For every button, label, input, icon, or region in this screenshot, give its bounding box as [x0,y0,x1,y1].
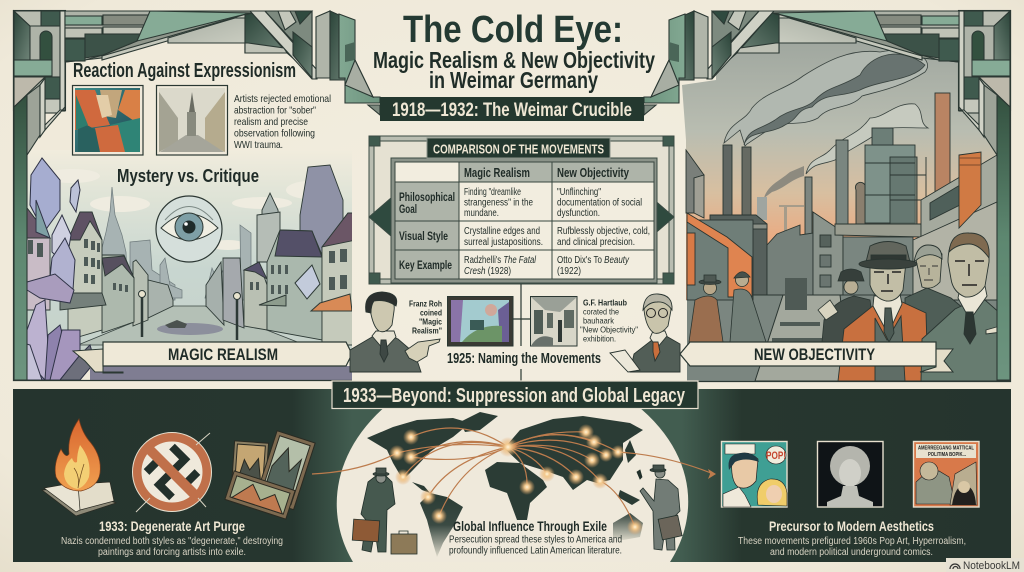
timeline connector [513,284,530,381]
table grid [395,162,654,279]
title [373,9,655,93]
table text: Philosophical [399,192,455,204]
continents [367,412,643,557]
heading: mystery vs critique: Mystery vs. Critique [117,166,259,186]
text: Franz Roh caption: "Magic [419,316,442,326]
panel outlines [14,10,1010,382]
right windows [250,249,347,294]
table text: New Objectivity [557,166,629,180]
table text [399,166,650,277]
text: degenerate art purge: 1933: Degenerate Art Purge [99,518,245,534]
figure: exile with pistol and briefcase [637,465,682,550]
table header bar: COMPARISON OF THE MOVEMENTS [433,142,604,156]
table text: Finding "dreamlike [464,187,521,198]
table text: Cresh (1928) [464,266,511,277]
text: G.F. Hartlaub caption: "New Objectivity" [580,324,638,334]
portrait: G.F. Hartlaub [610,294,680,372]
table text: Goal [399,204,417,216]
text: precursor to modern aesthetics: and modern political underground comics. [770,547,933,558]
comic: political underground [914,442,979,507]
text: reaction description: realism and precise [234,116,308,128]
back suited man [904,244,961,334]
panel: comparison table [369,136,674,284]
industrial buildings [686,148,996,300]
table text: strangeness" in the [464,198,533,208]
icon: destroyed paintings [225,431,315,519]
text: degenerate art purge: Nazis condemned both styles as "degenerate," destroying [61,536,283,547]
exile routes [312,428,711,527]
tank tower [855,128,926,224]
comic: pop art couple: POP! [766,450,786,462]
badge: NotebookLM: NotebookLM [963,560,1020,572]
workers in background [689,269,876,342]
left windows [28,239,128,292]
floating diamond crystal [295,265,320,299]
text: G.F. Hartlaub caption: bauhaark [583,316,615,326]
text: G.F. Hartlaub caption: exhibition. [583,334,616,344]
street lamps [138,290,240,340]
text: reaction description: abstraction for "sober" [234,104,316,116]
drawing: sober city street [156,86,228,155]
panel: new objectivity factory scene [682,20,1010,381]
globe and world map [312,400,716,562]
comic: political underground: POLITIMA BOPIK... [928,452,967,458]
table text: Rufblessly objective, cold, [557,226,650,237]
arrowhead [708,469,716,479]
ribbon: magic realism [73,342,352,373]
stained-glass frame [369,136,674,284]
road [78,306,305,345]
text: precursor to modern aesthetics: Precursor to Modern Aesthetics [769,518,934,534]
text: precursor to modern aesthetics [738,518,966,558]
eye in crystal ball [156,196,222,262]
orange canopy [687,213,753,300]
title: Magic Realism & New Objectivity [373,47,655,73]
text: Franz Roh caption: Franz Roh [409,298,442,308]
clouds [59,176,305,250]
art deco corner frame: left [14,10,380,380]
figure: exile with suitcases [352,468,417,554]
table text: (1922) [557,266,581,277]
heading: 1925 naming the movements: 1925: Naming the Movements [447,351,601,367]
table text: Key Example [399,260,452,272]
icon: burning book [42,419,116,516]
text: global influence through exile: Global Influence Through Exile [453,518,607,534]
comic: pop art couple [722,442,787,507]
text: Franz Roh caption: Realism" [412,326,442,336]
ground strip [90,366,352,380]
man in orange coat and hat [838,242,928,381]
table text: Radzhelli's The Fatal [464,255,537,266]
portrait: Franz Roh [350,292,440,372]
banner: 1918-1932: 1918—1932: The Weimar Crucible [392,100,632,121]
table text: surreal justapositions. [464,237,543,248]
distant skyline [101,187,251,300]
drawing: Bauhaus gallery interior [530,296,577,346]
panel: magic realism street scene [14,150,356,380]
panel: suppression and global legacy [13,389,1011,562]
ribbon: new objectivity [680,342,953,372]
painting: expressionist portrait [72,86,143,155]
sky [27,150,352,350]
badge: NotebookLM [946,558,1024,572]
banner: 1933 and beyond [332,381,698,408]
chimneys [723,93,950,235]
text: precursor to modern aesthetics: These movements prefigured 1960s Pop Art, Hyperroalism, [738,536,966,547]
exile destination glows [389,424,643,535]
painting: magic realist landscape [448,296,513,346]
table text: dysfunction. [557,208,600,219]
rail yard ground [755,295,850,381]
table text: and clinical precision. [557,237,635,248]
yard backdrop [687,290,1010,381]
left side buildings [27,208,173,340]
text: G.F. Hartlaub caption [580,298,638,344]
table text: Magic Realism [464,166,530,180]
front man in grey suit [921,233,1010,381]
table text: Otto Dix's To Beauty [557,255,630,266]
banner: 1933 and beyond: 1933—Beyond: Suppression and Global Legacy [343,385,686,407]
crystals [28,157,92,380]
icon: prohibited swastika symbol [132,432,212,512]
right side buildings [206,165,356,345]
text: reaction description: observation following [234,128,315,140]
text: reaction description: Artists rejected emotional [234,93,331,105]
heading: reaction against expressionism: Reaction Against Expressionism [73,60,296,82]
table text: mundane. [464,208,499,219]
text: reaction description [234,93,331,151]
awnings [311,294,352,311]
smoke plumes [724,50,928,198]
title: The Cold Eye: [403,9,623,51]
text: G.F. Hartlaub caption: corated the [583,306,619,316]
text: Franz Roh caption [409,298,442,336]
table text: documentation of social [557,198,642,208]
text: global influence through exile: profoundly influenced Latin American literature. [449,546,622,556]
text: reaction description: WWI trauma. [234,139,283,151]
table text: Crystalline edges and [464,226,540,237]
text: degenerate art purge [61,518,283,558]
text: G.F. Hartlaub caption: G.F. Hartlaub [583,298,627,308]
art deco corner frame: right [644,10,1010,380]
text: Franz Roh caption: coined [420,308,442,318]
table text: Visual Style [399,231,448,243]
ribbon: magic realism: MAGIC REALISM [168,345,278,364]
ribbon: new objectivity: NEW OBJECTIVITY [754,345,876,364]
text: degenerate art purge: paintings and forcing artists into exile. [98,547,246,558]
title: in Weimar Germany [429,67,598,93]
comic: political underground: AMERREEGANG MATTICAL [918,446,974,452]
text: global influence through exile [449,518,622,556]
table text: "Unflinching" [557,187,601,198]
sculpture: classical bust [818,442,883,507]
text: global influence through exile: Persecution spread these styles to America and [449,534,622,546]
table header bar [427,138,610,158]
sky [682,20,1000,300]
